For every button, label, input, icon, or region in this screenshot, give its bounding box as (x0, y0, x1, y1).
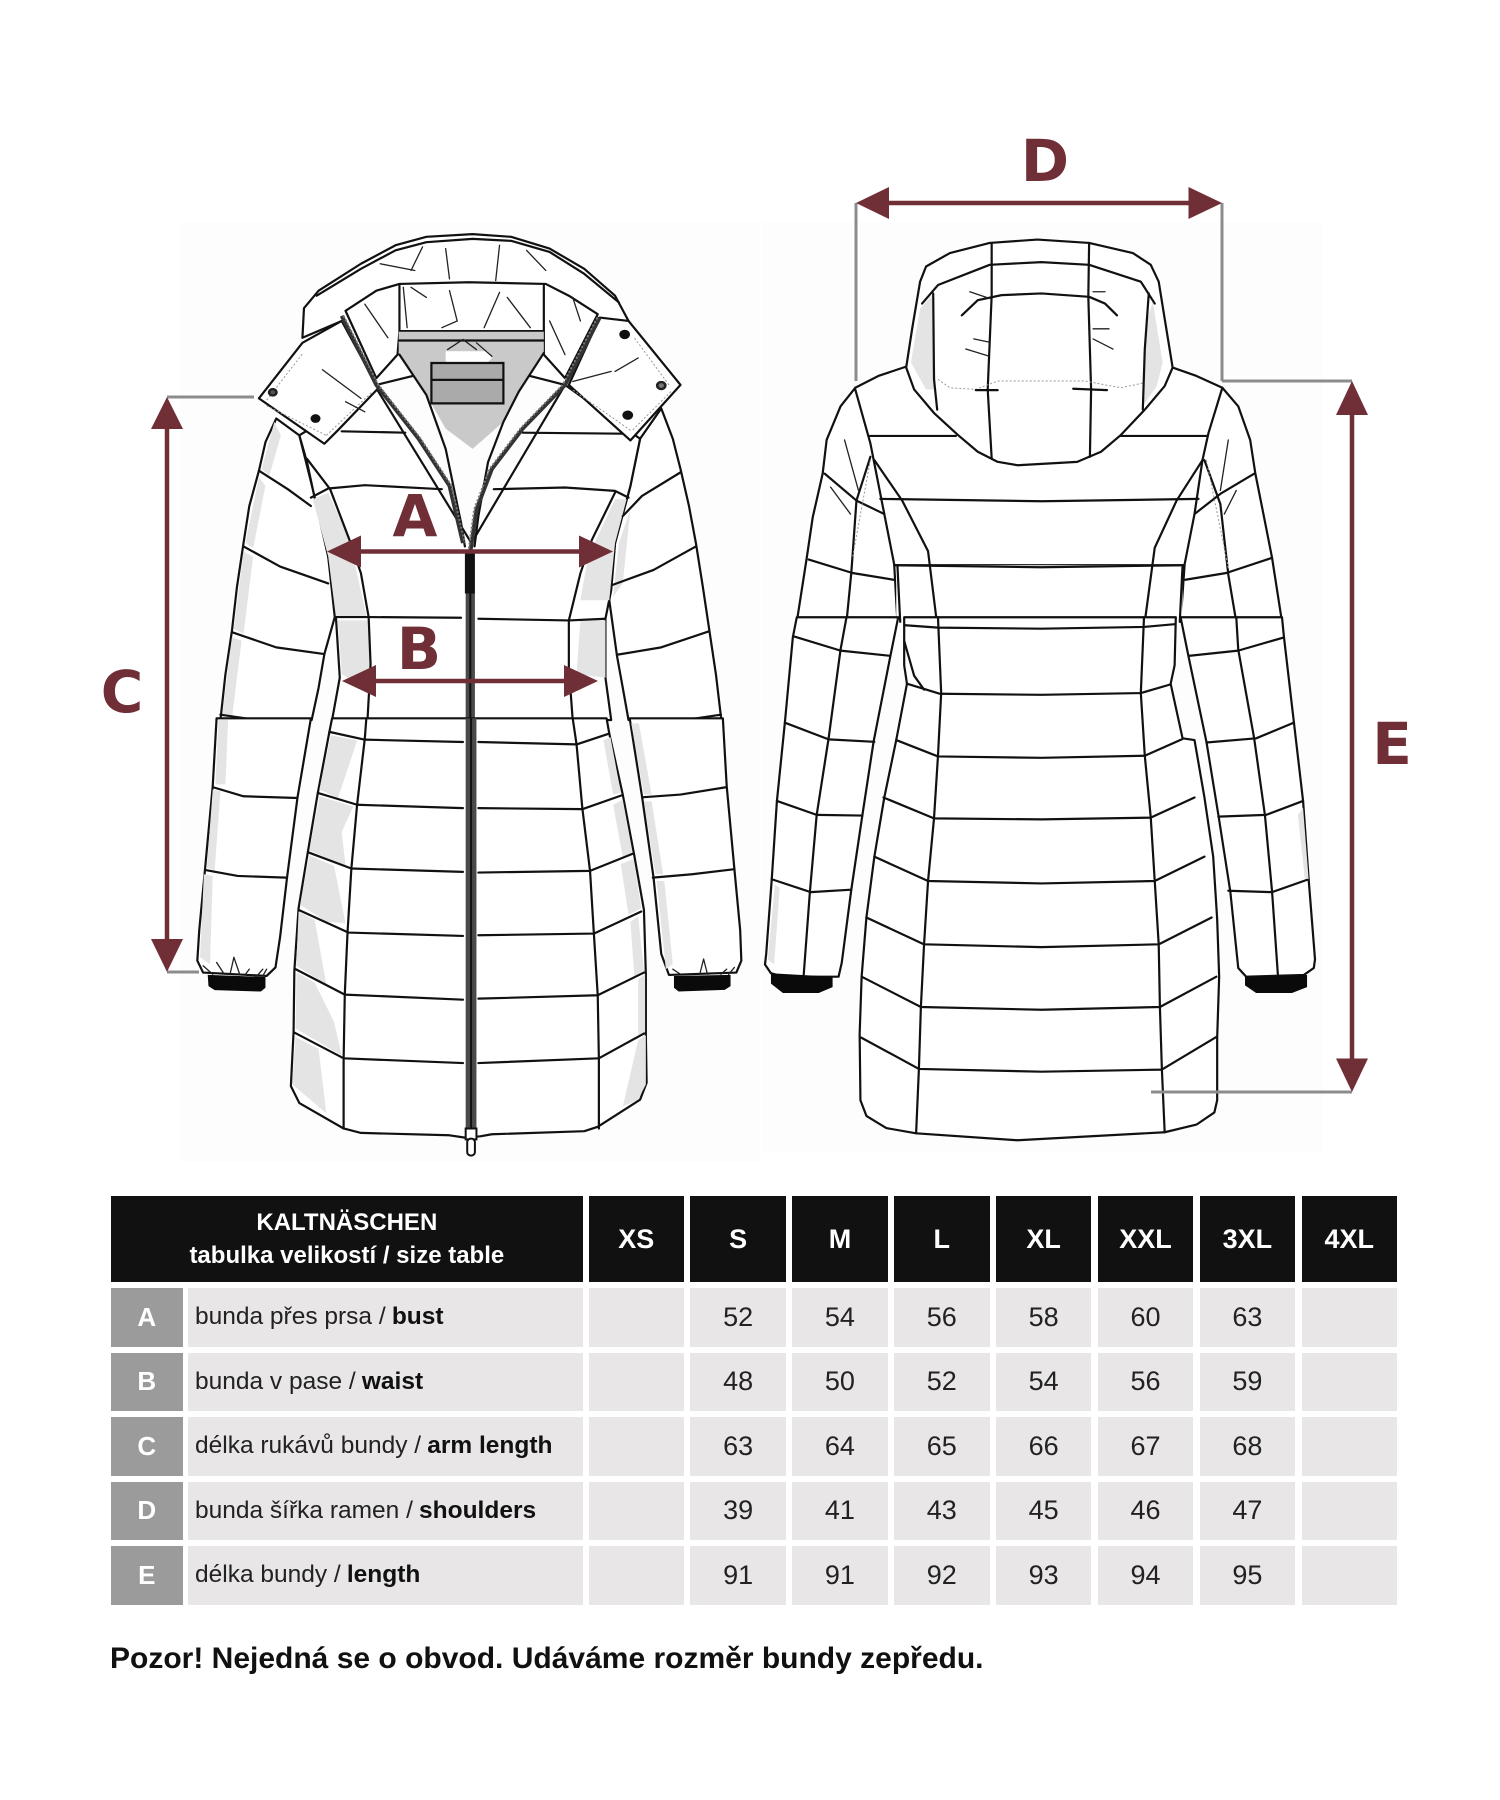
row A: bust: bunda přes prsa / (195, 1303, 386, 1330)
left sleeve upper (220, 419, 335, 720)
measurement E: length arrow (1151, 381, 1368, 1092)
front view jacket (180, 222, 760, 1162)
row B: waist: 52 (927, 1366, 957, 1396)
row C: arm length: 68 (1232, 1431, 1262, 1461)
grey neck lining (399, 332, 544, 449)
body seams (329, 732, 609, 744)
left collar flap (259, 321, 378, 444)
table header row: 4XL (1324, 1224, 1374, 1254)
row A: bust: bust (392, 1303, 444, 1330)
row D: shoulders: D (137, 1495, 156, 1525)
row B: waist: 50 (825, 1366, 855, 1396)
row A: bust: 60 (1131, 1302, 1161, 1332)
table header row: S (729, 1224, 747, 1254)
row B: waist: 59 (1232, 1366, 1262, 1396)
left sleeve lower (197, 718, 311, 976)
row B: waist: B (137, 1366, 156, 1396)
row B: waist: 56 (1131, 1366, 1161, 1396)
angled zipper tapes (342, 316, 463, 543)
row C: arm length: C (137, 1431, 156, 1461)
armhole and body seams (855, 388, 1222, 565)
measurement A: bust arrow (327, 536, 613, 568)
row C: arm length (111, 1417, 1397, 1476)
row D: shoulders: 45 (1029, 1495, 1059, 1525)
side shading left (313, 493, 367, 617)
right sleeve upper (609, 408, 721, 720)
centre zipper upper (465, 551, 475, 594)
row D: shoulders: 43 (927, 1495, 957, 1525)
table header row: M (829, 1224, 851, 1254)
row C: arm length: arm length (427, 1432, 552, 1459)
row B: waist (111, 1353, 1397, 1411)
table title (111, 1196, 583, 1282)
body upper (299, 385, 640, 720)
row C: arm length: délka rukávů bundy / (195, 1432, 421, 1459)
letter A: A (393, 482, 438, 550)
front jacket upper part (220, 234, 721, 720)
row B: waist: 54 (1029, 1366, 1059, 1396)
row E: length: E (138, 1560, 155, 1590)
row B: waist: 48 (723, 1366, 753, 1396)
row C: arm length: 67 (1131, 1431, 1161, 1461)
measurement D: shoulders arrow (856, 187, 1222, 381)
row C: arm length: 65 (927, 1431, 957, 1461)
left back cuff (771, 973, 833, 993)
row C: arm length: 66 (1029, 1431, 1059, 1461)
table header row: L (934, 1224, 950, 1254)
row E: length: 95 (1232, 1560, 1262, 1590)
body side shading (319, 735, 357, 798)
row A: bust: 63 (1232, 1302, 1262, 1332)
back jacket lower part (765, 617, 1315, 1140)
row D: shoulders (111, 1482, 1397, 1540)
row E: length: 91 (723, 1560, 753, 1590)
row E: length (111, 1546, 1397, 1605)
right cuff (674, 975, 731, 992)
centre zipper lower (466, 718, 476, 1128)
table title: tabulka velikostí / size table (189, 1242, 504, 1269)
body seams (342, 431, 623, 434)
row E: length: 91 (825, 1560, 855, 1590)
shoulders and upper sleeves (797, 367, 1282, 622)
right back cuff (1245, 975, 1307, 993)
row B: waist: waist (362, 1368, 423, 1395)
row A: bust: 56 (927, 1302, 957, 1332)
row C: arm length: 63 (723, 1431, 753, 1461)
row A: bust: 54 (825, 1302, 855, 1332)
back body seams (905, 624, 1175, 629)
row A: bust: 58 (1029, 1302, 1059, 1332)
body lower (291, 718, 647, 1138)
row E: length: 93 (1029, 1560, 1059, 1590)
table header row: XL (1026, 1224, 1061, 1254)
letter E: E (1372, 710, 1412, 778)
letter B: B (397, 615, 441, 683)
right sleeve lower (630, 718, 741, 975)
row D: shoulders: 47 (1232, 1495, 1262, 1525)
row A: bust (111, 1288, 1397, 1347)
sleeve seams (220, 471, 328, 720)
size table (111, 1196, 1397, 1605)
table header row: XXL (1119, 1224, 1172, 1254)
row E: length: length (347, 1561, 420, 1588)
left back sleeve (765, 617, 898, 977)
row E: length: 94 (1131, 1560, 1161, 1590)
sleeve seams upper (825, 474, 1254, 514)
hood back (906, 240, 1173, 465)
inner wrinkles (448, 339, 492, 356)
footnote: Pozor! Nejedná se o obvod. Udáváme rozměr bundy zepředu. (110, 1642, 984, 1675)
row A: bust: 52 (723, 1302, 753, 1332)
hood lining wrinkles (365, 245, 580, 355)
row E: length: délka bundy / (195, 1561, 341, 1588)
row D: shoulders: 39 (723, 1495, 753, 1525)
row D: shoulders: shoulders (419, 1497, 536, 1524)
front jacket lower part (197, 718, 741, 1156)
letter C: C (101, 658, 143, 726)
table title: KALTNÄSCHEN (256, 1209, 437, 1236)
row B: waist: bunda v pase / (195, 1368, 356, 1395)
placket lines (399, 353, 544, 546)
row D: shoulders: bunda šířka ramen / (195, 1497, 413, 1524)
row C: arm length: 64 (825, 1431, 855, 1461)
zipper pull (466, 1128, 476, 1156)
hood (302, 234, 629, 385)
back jacket upper part (797, 240, 1282, 623)
row D: shoulders: 41 (825, 1495, 855, 1525)
measurement B: waist arrow (342, 665, 598, 697)
left cuff (208, 975, 265, 992)
table header row: 3XL (1223, 1224, 1272, 1254)
back view jacket (763, 222, 1323, 1152)
table header row: XS (618, 1224, 654, 1254)
neck label (431, 363, 503, 403)
row A: bust: A (137, 1302, 156, 1332)
row D: shoulders: 46 (1131, 1495, 1161, 1525)
letter D: D (1021, 127, 1069, 195)
table header row (111, 1196, 1397, 1282)
row E: length: 92 (927, 1560, 957, 1590)
right back sleeve (1181, 617, 1315, 977)
back body (860, 617, 1219, 1140)
right collar flap (569, 318, 680, 440)
measurement C: arm length arrow (151, 397, 254, 972)
